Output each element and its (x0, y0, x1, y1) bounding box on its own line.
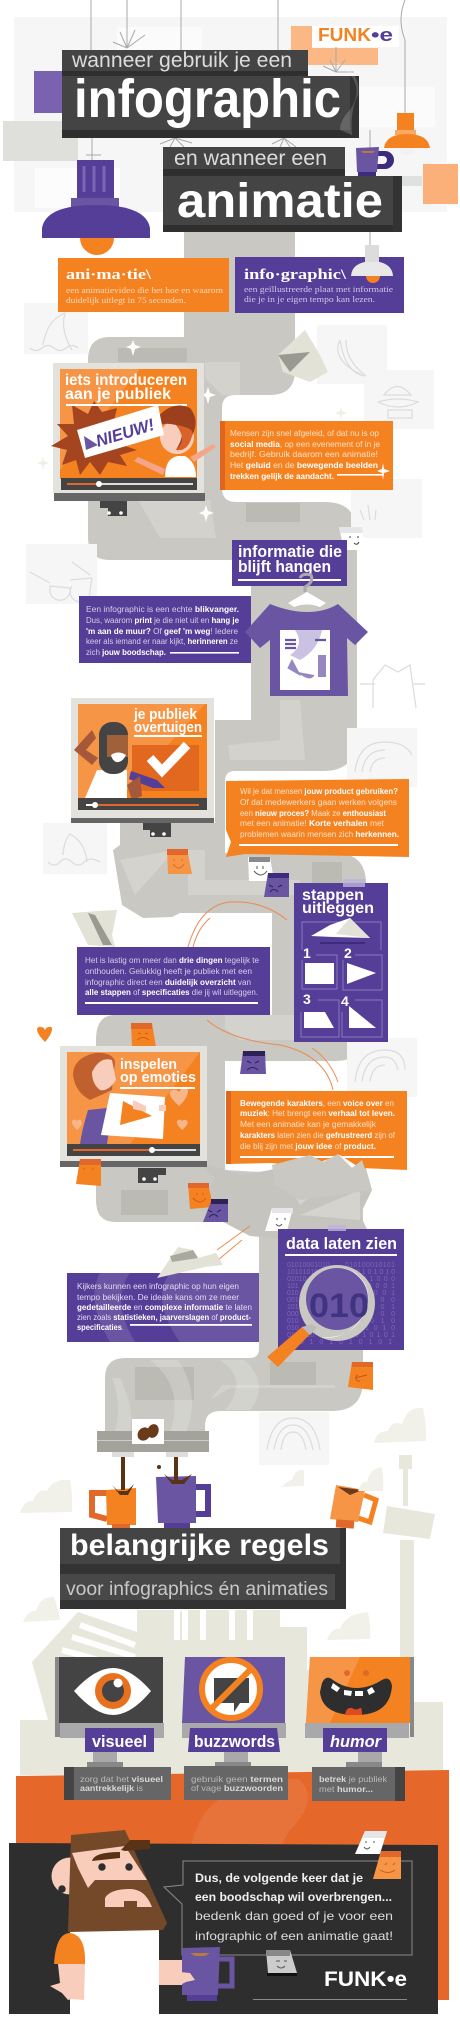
character (85, 770, 127, 798)
doodle cards in background (24, 303, 434, 1465)
panel: heading informatie die blijft hangen (232, 540, 347, 586)
panel: definition animatie (58, 258, 229, 312)
binary rows: 001 (287, 1297, 299, 1304)
text box: buzzwords (184, 1766, 288, 1800)
panel: text orange overtuigen: met een animatie! Korte verhalen met (240, 819, 385, 828)
text box: humor: betrek je publiek (319, 1774, 388, 1784)
panel: text orange introduceren (220, 421, 393, 490)
panel: text purple data: specificaties. (77, 1323, 124, 1332)
monitor: visueel: visueel (92, 1732, 147, 1751)
binary rows: 01010001010 (287, 1262, 330, 1269)
text box: visueel: aantrekkelijk is (80, 1783, 143, 1793)
pipe: grey conveyor shape (88, 232, 366, 1440)
panel: text purple infographic: Een infographic is een echte blikvanger. (86, 605, 239, 614)
logo: funk-e top: FUNK (318, 25, 371, 45)
icon: grey lamp small (351, 247, 393, 284)
player bar (78, 798, 207, 810)
orange ground panel (16, 1770, 449, 2000)
sticky note: orange smile (167, 849, 192, 874)
panel: monitor iets introduceren: NIEUW! (94, 415, 157, 451)
panel: definition animatie: ani·ma·tie\ (66, 267, 152, 283)
closing rule (253, 1999, 407, 2000)
monitor: humor: humor (330, 1732, 382, 1751)
title banner: belangrijke regels (60, 1528, 346, 1609)
binary rows: 10101010 (350, 1269, 395, 1276)
sticky note: white smile three (265, 1208, 293, 1231)
white panel (101, 1093, 165, 1139)
panel: text orange emoties: Bewegende karakters, een voice over en (240, 1099, 394, 1108)
binary rows (287, 1262, 395, 1346)
face (72, 1846, 147, 1888)
logo: funk-e bottom: FUNK•e (324, 1968, 407, 1991)
binary rows: 010100010101 (345, 1262, 395, 1269)
panel: text purple data: zien zoals statistieken, jaarverslagen of product- (77, 1313, 251, 1322)
sticky note: white smile (339, 527, 365, 550)
binary rows: 100 (370, 1297, 395, 1304)
binary rows: 0001 (365, 1290, 395, 1297)
icon: paper plane data (157, 1247, 223, 1278)
panel: monitor inspelen op emoties (60, 1046, 207, 1183)
icon: heart (37, 1027, 52, 1042)
icon: no buzz (202, 1660, 260, 1718)
panel: text purple infographic: keer als iemand er naar kijkt, herinneren ze (86, 637, 239, 646)
doodle icons (30, 313, 425, 1450)
icon: purple mug bottom (180, 1947, 232, 2001)
binary rows: 000 (287, 1311, 299, 1318)
crumpled pipe section: animatie side (195, 1155, 372, 1240)
speech bubble: bedenk dan goed of je voor een (195, 1909, 393, 1923)
binary rows: 010 (287, 1318, 299, 1325)
panel: text purple infographic: 'm aan de muur? Of geef 'm weg! Iedere (86, 627, 239, 636)
character (73, 1053, 115, 1100)
panel: text orange overtuigen: problemen waarin mensen zich herkennen. (240, 830, 399, 839)
panel: text orange emoties: die blij zijn met jouw idee of product. (240, 1142, 376, 1151)
orange mug with coffee (92, 1457, 136, 1528)
heading: je publiek (133, 706, 198, 723)
text box: humor: met humor... (319, 1784, 373, 1794)
panel: heading stappen uitleggen: uitleggen (302, 900, 374, 917)
title banner: en wanneer een: en wanneer een (174, 147, 327, 170)
icon: eye (74, 1668, 151, 1715)
flag (77, 405, 164, 458)
sticky note: grey bottom (266, 1950, 297, 1976)
logo: funk-e top: •e (371, 25, 393, 45)
crumple over orange panel (272, 1154, 372, 1200)
panel: text orange overtuigen (226, 779, 409, 857)
panel: definition infographic (235, 245, 404, 313)
title banner: infographic: infographic (74, 69, 341, 129)
panel: monitor je publiek overtuigen (71, 698, 214, 837)
panel: text purple infographic: Dus, waarom print je die niet uit en hang je (86, 616, 240, 625)
sticky note: orange frown (131, 1023, 156, 1047)
hearts (72, 1087, 188, 1130)
sticky note: orange neutral (76, 1159, 101, 1186)
text box: visueel (64, 1767, 171, 1800)
title banner: animatie: animatie (177, 175, 383, 228)
plane (311, 918, 370, 938)
speech bubble (164, 1861, 412, 1955)
sticky note: white smile two (248, 857, 274, 881)
orange flight path arcs (188, 902, 338, 1265)
panel: definition animatie: duidelijk uitlegt in 75 seconden. (66, 295, 186, 305)
sticky note: orange tongue (348, 1362, 373, 1390)
purple mug with coffee (156, 1457, 208, 1528)
panel: heading stappen uitleggen: 3 (303, 991, 311, 1007)
binary rows: 01010 (287, 1276, 307, 1283)
title banner: wanneer gebruik je een: wanneer gebruik je een (71, 49, 292, 72)
panel: text orange emoties: Met een animatie kan je gemakkelijk (240, 1120, 377, 1129)
magnifier (299, 1265, 375, 1341)
panel: monitor iets introduceren (51, 363, 216, 516)
sparkles pale (37, 406, 347, 470)
panel: text purple stappen: Het is lastig om meer dan drie dingen tegelijk te (85, 956, 260, 965)
speech bubble: Dus, de volgende keer dat je (195, 1871, 363, 1885)
skyline white cuts (62, 1610, 250, 1670)
icon: paper plane crumple left (72, 910, 117, 947)
player bar (67, 1144, 200, 1156)
panel: text orange introduceren: social media, op een evenement of in je (230, 440, 381, 449)
panel: text orange emoties: muziek: Het brengt een verhaal tot leven. (240, 1109, 395, 1118)
logo: funk-e top (312, 25, 399, 47)
character (165, 456, 196, 477)
panel: data laten zien: data laten zien (286, 1235, 397, 1253)
panel: heading stappen uitleggen: 2 (344, 945, 352, 961)
panel: definition infographic: die je in je eigen tempo kan lezen. (244, 294, 375, 304)
monitor: humor (305, 1657, 414, 1768)
panel: text orange emoties (226, 1091, 407, 1170)
panel: text orange introduceren: bedrijf. Gebruik daarom een animatie! (230, 450, 378, 459)
steam from mug (330, 60, 358, 135)
binary rows: 10001 (360, 1283, 395, 1290)
sticky note: orange bottom (373, 1851, 401, 1879)
speech bubble: een boodschap wil overbrengen... (195, 1890, 392, 1904)
orange mug tilted (330, 1485, 376, 1529)
binary rows: 010 (370, 1318, 395, 1325)
panel: heading informatie die blijft hangen: informatie die (238, 543, 342, 561)
panel: heading stappen uitleggen: stappen (302, 887, 364, 904)
sticky note: white bottom (355, 1831, 387, 1854)
binary rows: 010 (287, 1290, 299, 1297)
heading: inspelen (120, 1056, 177, 1073)
text box: buzzwords: gebruik geen termen (191, 1774, 283, 1784)
binary rows: 000 (370, 1311, 395, 1318)
panel: monitor je publiek overtuigen: overtuigen (134, 719, 202, 736)
text box: humor (312, 1767, 405, 1801)
text box: buzzwords: of vage buzzwoorden (191, 1783, 283, 1793)
heading: iets introduceren (65, 372, 187, 389)
sticky note: purple sad (264, 873, 289, 897)
header background panels (3, 17, 458, 212)
pencil (129, 771, 165, 788)
binary rows: 001 (370, 1304, 395, 1311)
left arm (50, 1964, 85, 2000)
binary rows: 0101010 (287, 1332, 314, 1339)
title banner: en wanneer een (163, 147, 345, 176)
icon: purple lamp left (42, 138, 150, 255)
binary rows: 1010 (365, 1325, 395, 1332)
sticky note: purple sad two (203, 1199, 228, 1222)
panel: text purple infographic: zich jouw boodschap. (86, 648, 166, 657)
icon: t-shirt on hanger (245, 574, 368, 696)
monitor: buzzwords: buzzwords (194, 1733, 275, 1751)
speech bubble: infographic of een animatie gaat! (195, 1929, 393, 1943)
crumpled pipe highlights (120, 850, 360, 1220)
right arm (159, 1960, 196, 1985)
panel: text orange introduceren: Het geluid en de bewegende beelden (230, 461, 378, 470)
skyline: Erasmus bridge, buildings, tower (20, 1455, 443, 1775)
panel: definition infographic: een geïllustreerde plaat met informatie (244, 284, 393, 294)
icon: paper plane crumple top (278, 330, 328, 382)
panel: text purple stappen: onthouden. Gelukkig heeft je publiek met een (85, 967, 252, 976)
clouds pale (20, 1408, 426, 1640)
panel: text orange overtuigen: een nieuw proces? Maak ze enthousiast (240, 809, 386, 818)
check mark (150, 745, 187, 771)
binary rows: 00101010101 (290, 1339, 392, 1346)
character: bearded man (50, 1830, 196, 2014)
panel: text orange introduceren: trekken gelijk de aandacht. (230, 472, 334, 481)
panel: text purple infographic (79, 596, 251, 663)
panel: dark conclusion (9, 1843, 438, 2014)
hanging strings (91, 0, 405, 248)
steam over coffee machine (110, 1360, 259, 1445)
panel: text purple data: gedetailleerde en complexe informatie te laten (77, 1303, 252, 1312)
binary rows: 101000 (355, 1276, 395, 1283)
panel: data laten zien (267, 1225, 404, 1367)
player bar (61, 478, 197, 490)
monitor: buzzwords (182, 1657, 286, 1768)
panel: heading stappen uitleggen: 4 (341, 993, 349, 1009)
panel: text purple data (67, 1273, 259, 1342)
coffee machine head (97, 1419, 209, 1457)
binary rows: 010101 (355, 1332, 395, 1339)
sticky note: orange happy (188, 1183, 213, 1209)
steam on orange (190, 1779, 308, 1900)
panel: text purple stappen (77, 947, 270, 1015)
folds (305, 963, 334, 984)
panel: definition animatie: een animatievideo die het hoe en waarom (66, 285, 223, 295)
panel: data laten zien: 010 (309, 1287, 369, 1325)
panel: text purple stappen: infographic direct een duidelijk overzicht van (85, 978, 251, 987)
panel: monitor iets introduceren: aan je publiek (65, 386, 171, 403)
icon: mouth (344, 1670, 350, 1676)
sparkles (126, 340, 216, 522)
title banner: belangrijke regels: belangrijke regels (70, 1529, 329, 1562)
panel: monitor inspelen op emoties: op emoties (120, 1069, 196, 1086)
panel: heading stappen uitleggen (294, 879, 388, 1042)
panel: text purple data: tempo bekijken. De ideale kans om ze meer (77, 1293, 239, 1302)
panel: text orange overtuigen: Of dat medewerkers gaan werken volgens (240, 798, 397, 807)
panel: heading informatie die blijft hangen: blijft hangen (238, 558, 331, 576)
binary rows: 101 (287, 1283, 299, 1290)
title banner: belangrijke regels: voor infographics én animaties (66, 1578, 328, 1600)
panel: text purple data: Kijkers kunnen een infographic op hun eigen (77, 1282, 239, 1291)
panel: text purple stappen: alle stappen of specificaties die jij wil uitleggen. (85, 988, 258, 997)
monitor: visueel (55, 1657, 164, 1768)
panel: definition infographic: info·graphic\ (244, 267, 347, 283)
purple mug on banner (356, 147, 394, 176)
binary rows: 10101010 (287, 1269, 318, 1276)
panel: text orange emoties: karakters laten zien die gefrustreerd zijn of (240, 1131, 396, 1140)
sticky note: purple angry (240, 1051, 266, 1074)
step numbers: 1 (303, 945, 311, 961)
binary rows: 101 (287, 1304, 299, 1311)
text box: visueel: zorg dat het visueel (80, 1774, 163, 1784)
panel: text orange introduceren: Mensen zijn snel afgeleid, of dat nu is op (230, 429, 380, 438)
icon: plane fold shadow (278, 352, 310, 372)
icon: orange lamp right (384, 113, 430, 156)
binary rows: 010 (287, 1325, 299, 1332)
burst (51, 401, 137, 475)
panel: text orange overtuigen: Wil je dat mensen jouw product gebruiken? (240, 787, 398, 796)
